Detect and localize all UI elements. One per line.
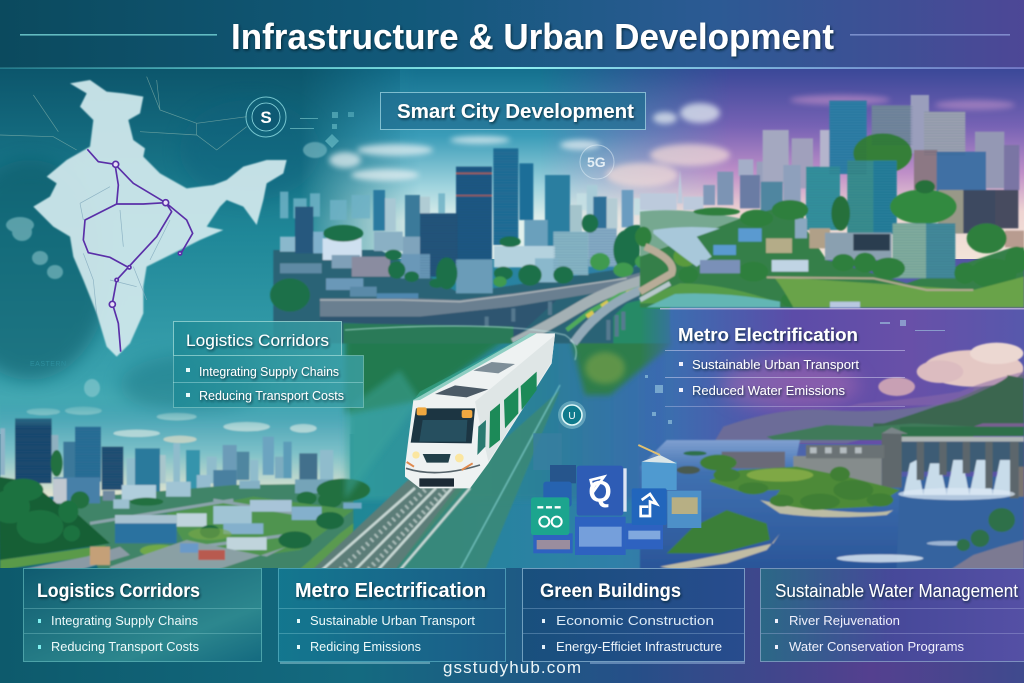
icon group: green building blocks: Q (588, 476, 612, 509)
label: 5G circle: 5G (587, 154, 606, 170)
label: 5G circle (580, 145, 614, 179)
panel: Metro Electrification card: Redicing Emissions (310, 639, 421, 654)
callout: Metro Electrification (665, 325, 905, 407)
heading box: Smart City Development: Smart City Development (397, 101, 634, 123)
panel: Metro Electrification card: Metro Electrification (295, 580, 486, 602)
title: Infrastructure & Urban Development (231, 16, 834, 57)
heading box: Smart City Development (380, 92, 646, 130)
zone: between train and metro panel (345, 300, 672, 500)
scene: river, dam and hills (640, 343, 1024, 570)
icon group: green building blocks (531, 433, 701, 555)
panel: Logistics Corridors card (24, 568, 262, 662)
sky: teal centre and purple right (300, 69, 1024, 259)
panel: Sustainable Water Management card (760, 568, 1024, 662)
panel: Sustainable Water Management card: Sustainable Water Management (775, 581, 1018, 601)
panel: Metro Electrification card (278, 568, 506, 662)
panel: Green Buildings card: Energy-Efficiet Infrastructure (556, 639, 722, 654)
panel: Metro purple background (640, 308, 1024, 444)
icon: glowing rail signal (558, 401, 586, 429)
panel: Sustainable Water Management card: River Rejuvenation (789, 613, 900, 628)
callout: Metro Electrification: Sustainable Urban Transport (692, 357, 859, 372)
train (405, 333, 555, 488)
panel: Metro Electrification card: Sustainable Urban Transport (310, 613, 475, 628)
panel: Logistics Corridors card: Integrating Supply Chains (51, 613, 198, 628)
footer band (0, 568, 1024, 683)
icon: circular S badge (246, 97, 286, 137)
callout: Logistics Corridors: Reducing Transport Costs (199, 388, 344, 403)
watermark: gsstudyhub.com: gsstudyhub.com (443, 658, 581, 677)
panel: Logistics Corridors card: Logistics Corridors (37, 581, 200, 602)
callout: Metro Electrification: Metro Electrification (678, 325, 858, 345)
icon: circular S badge: S (260, 108, 272, 127)
label: EASTERN: EASTERN (30, 361, 67, 368)
callout: Metro Electrification: Reduced Water Emissions (692, 383, 846, 398)
scene: right city with towers (635, 95, 1024, 308)
map: India with corridors (0, 77, 287, 357)
header bar (0, 0, 1024, 69)
panel: Green Buildings card: Green Buildings (540, 581, 681, 602)
panel: Logistics Corridors card: Reducing Transport Costs (51, 639, 199, 654)
panel: left map background (0, 69, 400, 434)
panel: Green Buildings card: Economic Construction (556, 613, 714, 628)
panel: Green Buildings card (522, 568, 744, 662)
callout: Logistics Corridors: Logistics Corridors (186, 331, 329, 350)
panel: Sustainable Water Management card: Water Conservation Programs (789, 639, 964, 654)
icon: glowing rail signal: U (568, 411, 576, 422)
callout: Logistics Corridors: Integrating Supply Chains (199, 364, 339, 379)
scene: central smart city (270, 148, 670, 343)
callout: Logistics Corridors (173, 322, 364, 408)
scene: lower-left city (0, 398, 370, 577)
scene: rail tracks and embankment (312, 326, 576, 570)
